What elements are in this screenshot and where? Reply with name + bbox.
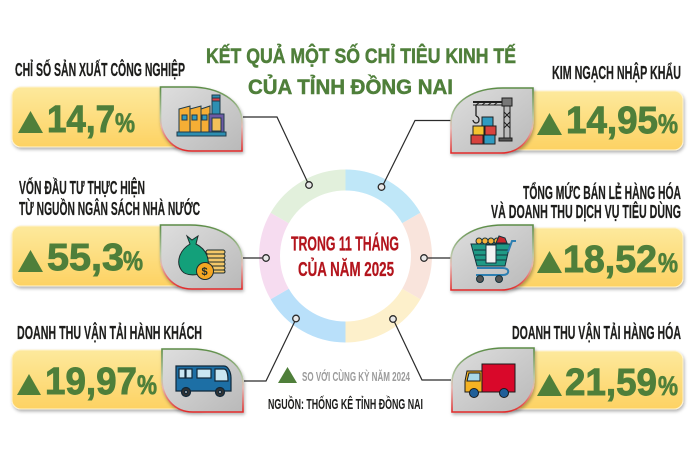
centre text: TRONG 11 THÁNG — [291, 232, 399, 256]
value: 55,3 — [47, 237, 124, 279]
donut ring — [270, 180, 421, 332]
legend: compared with same period 2024 — [278, 367, 410, 384]
icon: shopping cart — [471, 236, 516, 282]
value — [17, 361, 157, 403]
panel: passenger transport — [12, 322, 243, 412]
value bar — [495, 351, 683, 409]
icon tile — [160, 87, 242, 151]
connector: imports — [378, 120, 451, 190]
icon: bus — [176, 366, 231, 396]
legend: compared with same period 2024: SO VỚI CÙNG KỲ NĂM 2024 — [302, 369, 410, 384]
value: % — [137, 370, 157, 400]
title — [206, 44, 516, 99]
label: DOANH THU VẬN TẢI HÀNH KHÁCH — [17, 322, 202, 343]
value — [18, 237, 143, 279]
icon tile — [452, 348, 534, 412]
centre text: CỦA NĂM 2025 — [298, 257, 394, 281]
value: % — [123, 246, 143, 276]
icon: crane and containers — [471, 98, 512, 144]
value: % — [658, 371, 678, 401]
value: % — [658, 248, 678, 278]
centre text — [291, 232, 399, 281]
value — [18, 99, 135, 141]
source: NGUỒN: THỐNG KÊ TỈNH ĐỒNG NAI — [268, 395, 423, 413]
icon: money bag and coins — [179, 236, 225, 280]
value: % — [115, 108, 135, 138]
icon tile — [451, 225, 533, 290]
value: 14,95 — [566, 100, 658, 142]
value bar — [495, 228, 683, 287]
value: % — [658, 109, 678, 139]
panel: imports — [451, 62, 683, 153]
icon tile — [160, 225, 242, 289]
panel: freight transport — [452, 322, 683, 412]
value — [537, 362, 678, 404]
value bar — [495, 91, 683, 150]
panel: state budget investment: TỪ NGUỒN NGÂN SÁCH NHÀ NƯỚC — [19, 198, 200, 219]
connector: state budget investment — [243, 255, 269, 261]
dollar glyph: $ — [202, 266, 208, 278]
connector: industrial production — [243, 117, 312, 188]
label: CHỈ SỐ SẢN XUẤT CÔNG NGHIỆP — [15, 59, 185, 80]
value: 14,7 — [47, 99, 115, 141]
connector: freight transport — [390, 316, 451, 380]
value bar — [12, 350, 207, 409]
icon tile — [162, 349, 243, 412]
label: VỐN ĐẦU TƯ THỰC HIỆN — [19, 177, 145, 198]
icon tile — [451, 88, 533, 153]
value: 18,52 — [563, 239, 657, 281]
title: CỦA TỈNH ĐỒNG NAI — [248, 75, 453, 99]
value: 21,59 — [565, 362, 657, 404]
value — [537, 239, 678, 281]
title: KẾT QUẢ MỘT SỐ CHỈ TIÊU KINH TẾ — [206, 44, 516, 68]
value — [537, 100, 678, 142]
value bar — [12, 87, 207, 147]
panel: state budget investment — [12, 177, 242, 289]
connector: retail — [421, 255, 451, 261]
panel: retail — [451, 182, 683, 290]
value bar — [12, 226, 207, 286]
icon: factory — [177, 95, 226, 136]
connector: passenger transport — [244, 315, 299, 381]
icon: truck — [465, 364, 515, 398]
value: 19,97 — [45, 361, 137, 403]
panel: industrial production — [12, 59, 242, 151]
